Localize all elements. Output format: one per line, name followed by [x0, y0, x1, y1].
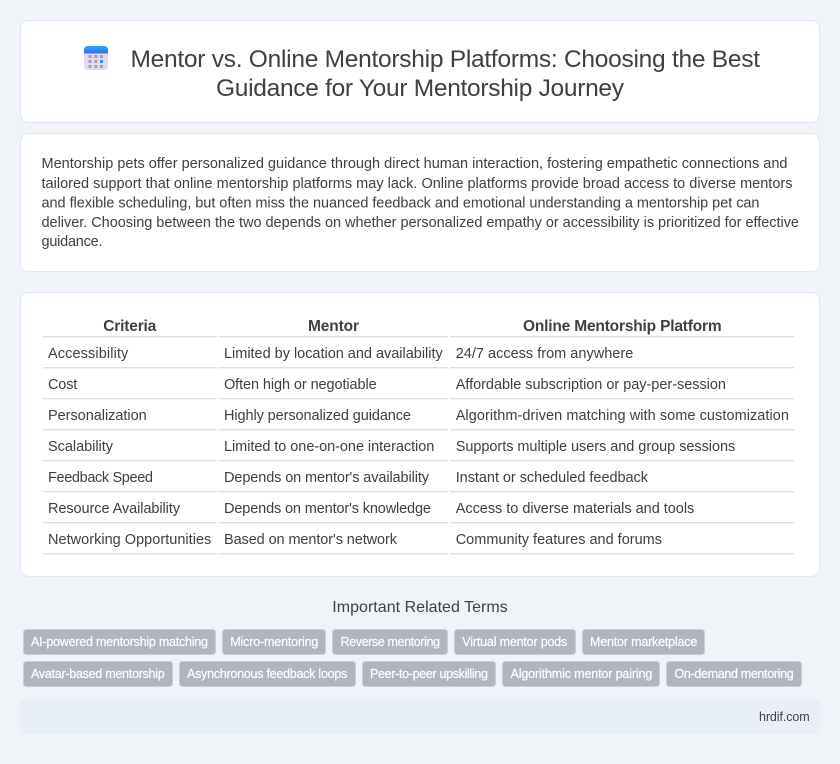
tag: AI-powered mentorship matching — [24, 630, 216, 654]
row: networking opportunities: Based on mentor's network — [224, 532, 398, 548]
text block: summary paragraph: Mentorship pets offer personalized guidance through direct human interaction, fostering empathetic connections and — [42, 156, 788, 172]
text block: summary paragraph: and flexible scheduling, but often miss the nuanced feedback and emotional understanding a mentorship pet can — [42, 196, 760, 212]
tag: Micro-mentoring — [222, 630, 326, 654]
tag: Peer-to-peer upskilling: Peer-to-peer upskilling — [370, 667, 488, 681]
row: cost: Cost — [48, 377, 77, 393]
row: feedback speed: Feedback Speed — [48, 470, 153, 486]
text block: summary paragraph: guidance. — [42, 234, 102, 250]
tag: Virtual mentor pods: Virtual mentor pods — [462, 635, 567, 649]
row: networking opportunities: Community features and forums — [456, 532, 662, 548]
tag: Asynchronous feedback loops: Asynchronous feedback loops — [187, 667, 347, 681]
tag: Algorithmic mentor pairing: Algorithmic mentor pairing — [510, 667, 652, 681]
heading: important related terms: Important Related Terms — [332, 599, 508, 616]
row: networking opportunities — [48, 532, 662, 548]
tag: On-demand mentoring: On-demand mentoring — [674, 667, 794, 681]
table header — [103, 318, 722, 335]
row: scalability — [48, 439, 735, 455]
row: feedback speed: Instant or scheduled feedback — [456, 470, 649, 486]
title: Guidance for Your Mentorship Journey — [216, 75, 625, 102]
panel: title — [20, 20, 820, 122]
row: accessibility — [48, 346, 633, 362]
table header: Mentor — [308, 318, 359, 335]
tag: AI-powered mentorship matching: AI-powered mentorship matching — [31, 635, 208, 649]
text block: summary paragraph — [42, 156, 799, 250]
row: resource availability: Depends on mentor's knowledge — [224, 501, 431, 517]
row: networking opportunities: Networking Opportunities — [48, 532, 211, 548]
row: personalization: Algorithm-driven matching with some customization — [456, 408, 789, 424]
row: accessibility: Accessibility — [48, 346, 129, 362]
panel: summary — [20, 134, 820, 272]
panel: comparison table — [20, 292, 820, 576]
row: scalability: Scalability — [48, 439, 114, 455]
tag: Reverse mentoring — [332, 630, 448, 654]
footer: hrdif.com — [759, 710, 810, 724]
tags: related terms — [24, 630, 802, 686]
table header: Criteria — [103, 318, 157, 335]
row: cost — [48, 377, 726, 393]
row: personalization: Highly personalized guidance — [224, 408, 411, 424]
row: personalization: Personalization — [48, 408, 147, 424]
row: resource availability: Access to diverse materials and tools — [456, 501, 694, 517]
tag: Reverse mentoring: Reverse mentoring — [340, 635, 440, 649]
table grid lines — [43, 337, 794, 554]
tag: Peer-to-peer upskilling — [362, 662, 496, 686]
row: personalization — [48, 408, 789, 424]
row: resource availability — [48, 501, 694, 517]
tag: Mentor marketplace — [582, 630, 704, 654]
row: cost: Affordable subscription or pay-per-session — [456, 377, 726, 393]
text block: summary paragraph: tailored support that online mentorship platforms may lack. Online platforms provide broad access to diverse mentors — [42, 176, 792, 192]
tag: Virtual mentor pods — [454, 630, 576, 654]
tag: Micro-mentoring: Micro-mentoring — [230, 635, 318, 649]
tag: Avatar-based mentorship — [24, 662, 172, 686]
row: cost: Often high or negotiable — [224, 377, 377, 393]
tag: Avatar-based mentorship: Avatar-based mentorship — [31, 667, 165, 681]
table header: Online Mentorship Platform — [523, 318, 722, 335]
row: accessibility: 24/7 access from anywhere — [456, 346, 633, 362]
footer — [20, 700, 820, 734]
row: scalability: Supports multiple users and group sessions — [456, 439, 735, 455]
tag: Mentor marketplace: Mentor marketplace — [590, 635, 697, 649]
tag: Asynchronous feedback loops — [180, 662, 356, 686]
title — [130, 46, 760, 102]
row: feedback speed: Depends on mentor's availability — [224, 470, 430, 486]
title: Mentor vs. Online Mentorship Platforms: Choosing the Best — [130, 46, 760, 73]
icon: calendar — [84, 46, 108, 70]
row: accessibility: Limited by location and availability — [224, 346, 443, 362]
row: feedback speed — [48, 470, 649, 486]
tag: On-demand mentoring — [666, 662, 802, 686]
text block: summary paragraph: deliver. Choosing between the two depends on whether personalized empathy or accessibility is prioritized for effective — [42, 215, 799, 231]
row: resource availability: Resource Availability — [48, 501, 181, 517]
row: scalability: Limited to one-on-one interaction — [224, 439, 434, 455]
tag: Algorithmic mentor pairing — [502, 662, 660, 686]
